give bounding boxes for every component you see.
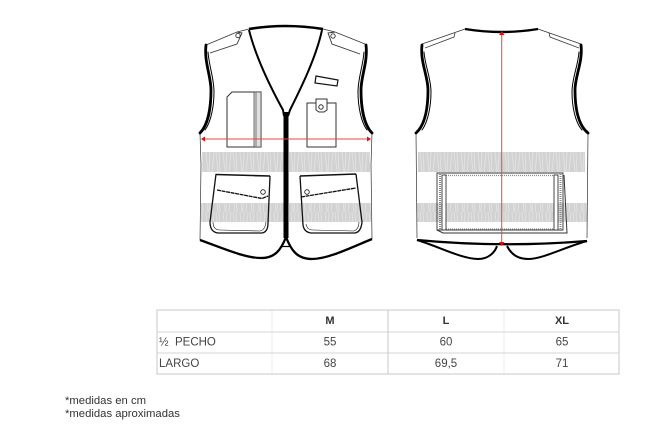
row: half chest: 55 — [324, 336, 336, 348]
front reflective bands — [201, 152, 371, 222]
chest name label — [315, 76, 338, 86]
row: length: 69,5 — [435, 358, 457, 370]
back length measurement arrow — [499, 31, 504, 246]
footnotes: *medidas en cm — [65, 395, 146, 407]
row: half chest: 60 — [440, 336, 452, 348]
back yoke seams — [425, 33, 579, 48]
front body outline — [200, 29, 372, 240]
left lower pocket — [210, 174, 270, 233]
chest width measurement arrow — [201, 136, 371, 142]
left chest zip pocket — [227, 92, 261, 147]
back armhole trims — [416, 45, 588, 133]
row: length: 68 — [324, 358, 336, 370]
row: length: LARGO — [159, 358, 199, 370]
row: half chest: 65 — [556, 336, 568, 348]
front shoulder tabs — [210, 32, 360, 54]
back body outline — [416, 29, 588, 238]
front armhole trims — [200, 45, 372, 133]
front view of vest — [200, 26, 372, 259]
header row: XL — [555, 315, 569, 327]
table grid — [157, 310, 619, 374]
right lower pocket — [300, 174, 362, 233]
back hem with flaps — [417, 240, 587, 259]
row: half chest: ½ PECHO — [159, 336, 216, 348]
right chest pocket with tab — [307, 99, 336, 147]
header row: M — [325, 315, 335, 327]
front hem — [200, 237, 372, 259]
row: length: 71 — [556, 358, 568, 370]
footnotes: *medidas aproximadas — [65, 408, 180, 420]
header row: L — [443, 315, 450, 327]
header row — [325, 315, 569, 327]
back large pocket with zips — [437, 173, 567, 233]
size table — [157, 310, 619, 374]
row: half chest — [159, 336, 568, 348]
back view of vest — [416, 29, 588, 259]
back reflective bands — [417, 152, 587, 222]
row: length — [159, 358, 568, 370]
front neckline and zip trim — [249, 26, 323, 246]
back neckline — [465, 29, 538, 32]
footnotes — [65, 395, 180, 420]
